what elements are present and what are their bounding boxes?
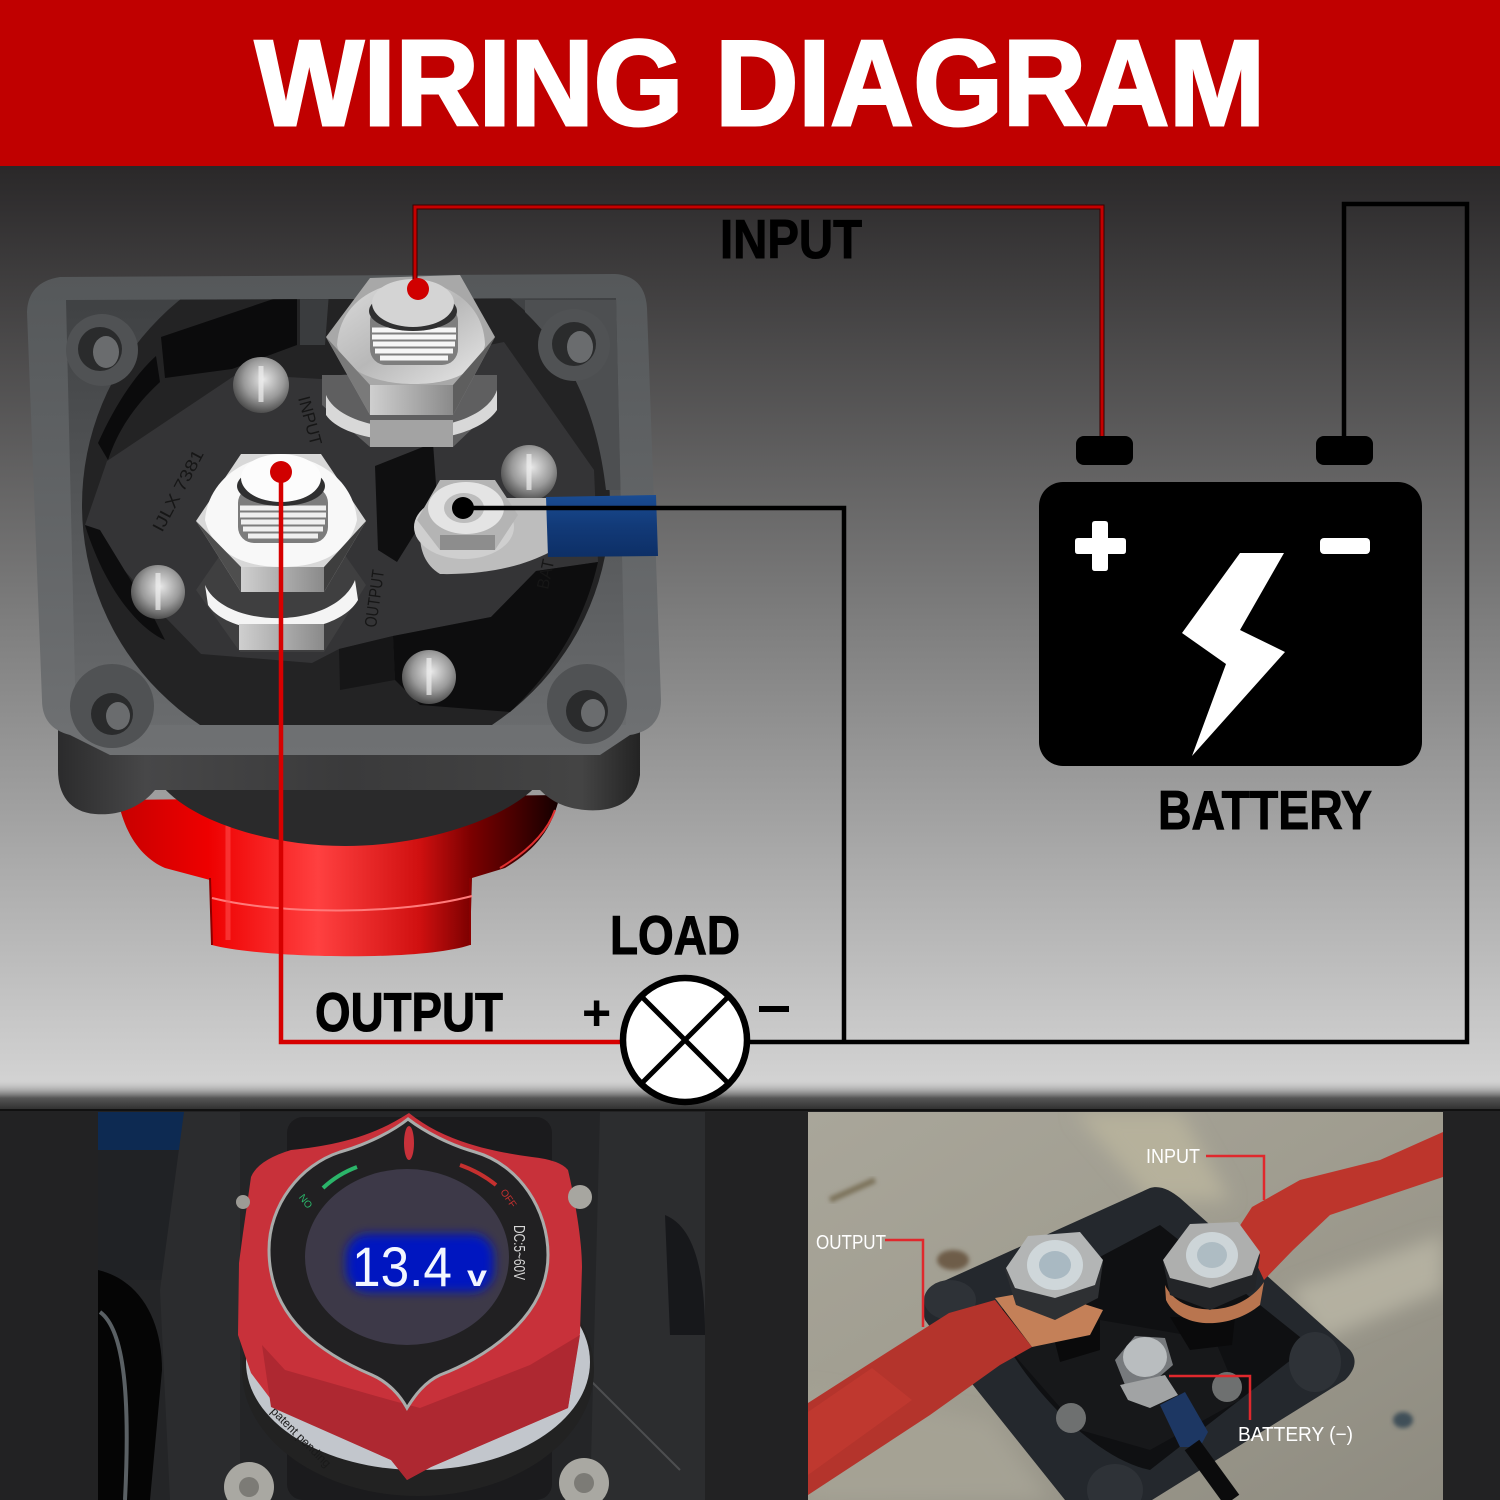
centre divider shadow — [375, 443, 437, 562]
moulded label text: OUTPUT — [361, 568, 388, 629]
mounting flange — [27, 274, 661, 755]
voltage reading: 13.4 — [352, 1235, 452, 1298]
lower shadow step — [393, 562, 598, 712]
diagram background — [0, 166, 1500, 1111]
voltage unit: v — [467, 1260, 487, 1293]
silver base ring — [246, 1326, 594, 1470]
display glow — [346, 1234, 494, 1292]
knob dial face — [269, 1119, 548, 1408]
moulded label text: INPUT — [294, 394, 325, 447]
ring legend: patent pending — [268, 1404, 334, 1470]
off arc — [460, 1165, 496, 1185]
negative terminal with ring lug — [414, 480, 658, 574]
on label: ON — [297, 1191, 315, 1210]
terminal dot: input — [407, 278, 429, 300]
moulded label text: IJLX 7381 — [149, 446, 208, 535]
battery switch device — [27, 241, 661, 956]
knob lower skirt — [262, 1335, 580, 1480]
blue crimp — [1160, 1392, 1208, 1447]
load symbol — [582, 978, 789, 1102]
knob side bolts — [224, 1185, 609, 1500]
upper black crescent — [161, 291, 297, 378]
photo label: output: OUTPUT — [816, 1232, 886, 1254]
input nut — [1163, 1254, 1260, 1310]
on arc — [323, 1167, 357, 1188]
output cable — [808, 1300, 1032, 1495]
callout lines — [885, 1156, 1264, 1420]
wire: output to load — [281, 472, 622, 1042]
central plate — [85, 342, 598, 663]
input terminal — [322, 275, 497, 447]
housing interior — [1000, 1225, 1310, 1470]
moulded label text: BAT — [533, 558, 558, 591]
wire: negative terminal to load — [463, 508, 844, 1042]
voltage range label: DC:5~60V — [510, 1225, 527, 1280]
right upper wall — [525, 300, 625, 490]
switch cavity — [66, 298, 624, 725]
display window — [305, 1169, 509, 1345]
load negative sign — [759, 1006, 789, 1012]
red knob grip — [238, 1113, 582, 1480]
blue crimp terminal — [546, 495, 658, 557]
moulded label text — [149, 394, 558, 629]
switch underside hub — [155, 775, 545, 846]
photo: installed terminals — [808, 1112, 1443, 1500]
input label: INPUT — [720, 208, 862, 270]
battery icon — [1039, 436, 1422, 766]
photo label: input: INPUT — [1146, 1146, 1200, 1168]
photo: voltage display knob — [98, 1112, 705, 1500]
red knob — [118, 795, 560, 956]
negative terminal nut — [1115, 1336, 1173, 1385]
bottom panel — [0, 1111, 1500, 1500]
wire: battery positive to input — [415, 207, 1102, 437]
input cable — [1239, 1132, 1443, 1280]
switch housing — [923, 1187, 1355, 1500]
mounting screws — [131, 357, 557, 704]
copper lugs — [995, 1290, 1103, 1347]
black wire — [1192, 1445, 1232, 1500]
flange lower body and feet — [58, 730, 640, 814]
output label: OUTPUT — [315, 981, 503, 1043]
terminal dot: output — [270, 461, 292, 483]
housing screws — [1056, 1372, 1242, 1433]
under-nuts — [1055, 1320, 1218, 1362]
wire: battery negative to load — [750, 204, 1467, 1042]
title: WIRING DIAGRAM — [255, 15, 1265, 151]
dial pointer — [404, 1126, 414, 1160]
housing corner bosses — [924, 1280, 1341, 1500]
terminal dot: negative — [452, 497, 474, 519]
load positive sign: + — [582, 985, 611, 1041]
off label: OFF — [498, 1187, 518, 1210]
battery label: BATTERY — [1158, 779, 1372, 841]
load label: LOAD — [610, 904, 740, 966]
header banner — [0, 0, 1500, 166]
output terminal — [196, 454, 366, 652]
output nut — [1006, 1262, 1103, 1320]
corner mounting bosses — [66, 309, 627, 748]
photo label: battery negative: BATTERY (−) — [1238, 1424, 1353, 1446]
mounting plate — [287, 1117, 552, 1500]
